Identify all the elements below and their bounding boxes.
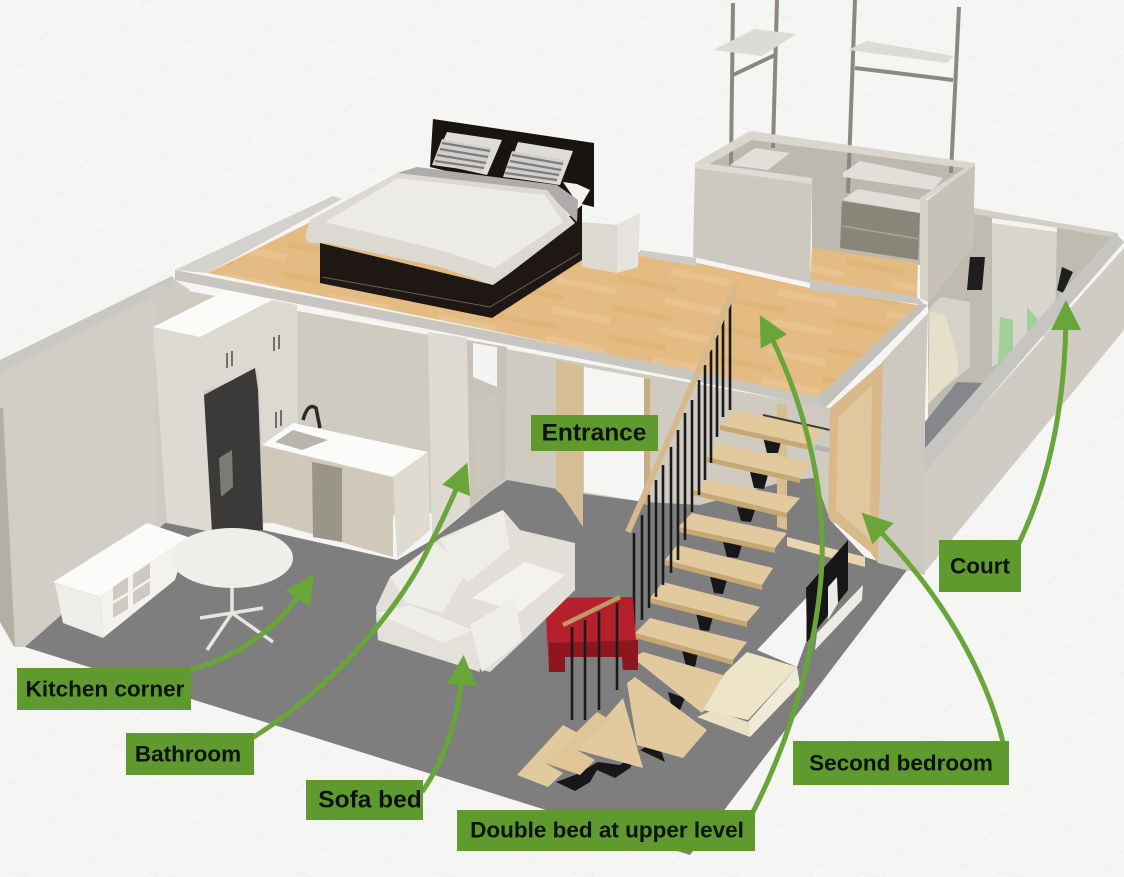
fridge [204,368,263,532]
back cushion left [390,543,467,613]
balusters [634,300,730,627]
court black item right [1057,267,1073,293]
tv shelf [815,585,863,650]
label: court [939,540,1021,592]
pillow back left [433,132,502,175]
right shelf low [843,161,943,190]
label: entrance [531,415,658,451]
arrow: double bed [753,323,822,812]
court wall [925,248,1124,572]
court black item left [967,257,985,290]
cupboard front [200,300,298,445]
deck back rim left [175,196,342,273]
double bed [305,119,640,318]
front wall top [695,162,812,184]
cupboard handles [227,335,281,428]
nightstand front [582,222,617,273]
fridge dispenser [219,450,233,497]
right wall edge [920,198,928,302]
white shelf unit [53,523,188,638]
label: sofa bed [306,780,423,820]
counter top [262,423,428,477]
right wall [928,165,975,302]
left shelf high [713,29,796,56]
dresser line [842,226,920,239]
bed base side [748,667,800,737]
grey floor [925,382,983,452]
tv picture [828,577,838,620]
cupboard top [153,290,272,337]
court door [992,218,1057,367]
upper deck wood floor [175,196,928,408]
label: bathroom: Bathroom [135,742,241,766]
rear wall [695,136,975,265]
pillow front right [503,151,565,183]
pillow stripes right [505,155,563,180]
duvet top [325,178,563,268]
door top [992,218,1057,232]
court and right rooms [918,208,1124,572]
court wall rim [973,208,1118,238]
entrance door [556,360,650,527]
right shelf high [848,41,954,63]
arm top [377,605,473,643]
tread 5 [665,545,773,590]
label: court: Court [950,554,1010,578]
cabinet side [393,452,430,558]
sheet [563,182,590,207]
wall rim [695,131,975,200]
tv [806,540,848,642]
winder 3 [577,698,643,768]
shelf frames [731,0,959,193]
mattress [703,652,797,720]
deck right rim [818,303,928,408]
back wall under deck [155,285,835,535]
arm front [376,615,480,672]
second bedroom bed [928,312,958,404]
seat front [470,597,522,672]
duvet [305,173,575,285]
arrow: sofa bed [422,664,463,792]
room floor rim [810,280,925,305]
lower stair railing [563,597,620,720]
tread 1 [720,410,825,450]
cabinet front [262,448,393,557]
tread 3 [693,480,800,518]
court green glass [998,317,1013,370]
tread 4 [678,513,787,553]
arrow: bathroom [252,471,464,738]
arrow: court [1018,309,1066,545]
label: entrance: Entrance [542,420,646,446]
deck front rim [175,270,825,408]
label: double bed at upper level [457,810,755,851]
staircase [517,283,825,791]
red table [545,597,638,672]
tread 7 [635,618,747,665]
winder 5 [517,725,578,787]
label: sofa bed: Sofa bed [318,786,422,814]
tv and low bed [697,540,863,737]
dishwasher [312,462,342,542]
sofa bed [376,510,575,672]
winder 1 [633,652,733,713]
room partition [928,297,970,400]
court green glass right [1027,307,1038,337]
arrow: second bedroom [868,519,1003,742]
carpet floor [25,478,907,855]
label: double bed at upper level: Double bed at upper level [470,818,744,842]
nightstand side [617,213,640,273]
dresser top [842,189,922,213]
cupboard side [153,327,212,532]
stair supports [556,437,782,791]
label: kitchen corner [17,668,191,710]
back cushion right [440,510,510,583]
second bedroom door and wall [787,313,928,575]
seat right [472,562,565,612]
deck back rim right [640,250,696,266]
upper room walls and shelves [693,0,975,305]
wood in room [810,248,918,297]
pillow stripes left [435,143,490,168]
bed base front [697,710,750,737]
left shelf low [730,148,790,170]
headboard [430,119,594,207]
winder 4 [545,712,610,775]
round table [171,528,293,650]
white bed band [757,597,807,667]
arrow: kitchen corner [190,581,309,670]
pillow front left [432,139,492,172]
kitchen corner [153,290,430,558]
label: second bedroom: Second bedroom [809,750,993,776]
label: bathroom [126,733,254,775]
label: second bedroom [793,741,1009,785]
back posts and bars [763,403,870,530]
pillow back right [505,142,573,185]
tap [303,406,320,428]
court wall top [918,233,1124,472]
dresser front [840,201,920,260]
label: kitchen corner: Kitchen corner [26,676,185,702]
tread 6 [650,582,760,627]
base [320,205,582,318]
base line [322,253,580,307]
handrail [628,283,737,532]
front wall [693,165,812,283]
left wall [0,276,190,647]
throw [397,167,578,222]
tread 2 [707,443,812,483]
bathroom door [428,332,507,540]
winder 2 [627,677,707,758]
sink [275,430,328,450]
